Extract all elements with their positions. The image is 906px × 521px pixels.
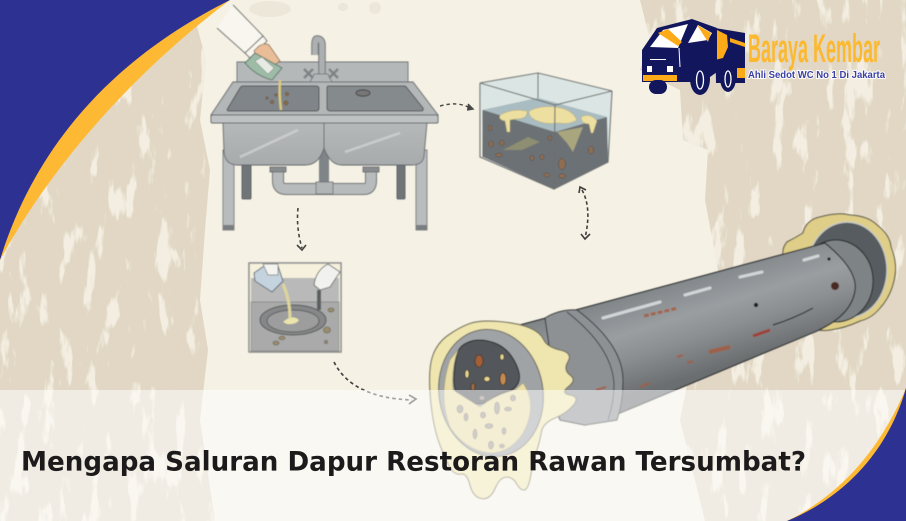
truck tank [715, 28, 745, 83]
arrow: sink to grease trap [440, 104, 473, 110]
tank contents [483, 98, 608, 189]
illustration: floor drain panel [249, 263, 341, 352]
tank glass edges [480, 73, 612, 189]
corner: top-left gold swoosh [0, 0, 230, 260]
sink basins body [223, 122, 427, 165]
truck door line [679, 48, 680, 67]
arrow: floor drain to pipe [334, 362, 416, 404]
sink backsplash [237, 62, 408, 86]
truck side window [688, 25, 712, 43]
title: Mengapa Saluran Dapur Restoran Rawan Tersumbat? [21, 446, 806, 478]
pipe rust holes [754, 257, 839, 307]
drain opening [260, 305, 326, 335]
truck bumper [643, 75, 677, 81]
tank glass back [480, 73, 612, 189]
sink countertop [211, 82, 438, 122]
food scraps [266, 92, 289, 105]
hand pouring bottle [217, 5, 282, 110]
arrow: sink to floor drain [297, 208, 306, 250]
corner: top-left blue shape [0, 0, 230, 260]
illustration: grease trap tank [480, 73, 612, 189]
illustration: double kitchen sink [211, 5, 438, 230]
left basin [227, 86, 319, 111]
floor scraps [273, 308, 334, 345]
illustration: clogged grease pipe [429, 214, 896, 499]
drain pipes [270, 150, 379, 194]
faucet [304, 39, 338, 82]
grease poured in drain [283, 317, 299, 324]
pipe body [520, 243, 855, 425]
pipe highlights [553, 256, 818, 330]
sink front legs [223, 150, 427, 230]
tank debris [488, 125, 594, 178]
right hand [314, 264, 340, 290]
floating grease [500, 106, 597, 152]
grease mass inside pipe [444, 350, 530, 453]
right basin [327, 86, 423, 111]
blockage debris [457, 354, 516, 449]
corner: bottom-right gold swoosh [787, 388, 906, 521]
drain strainer [356, 90, 370, 96]
arrow: tank to pipe, double headed [579, 187, 590, 239]
truck cab [642, 19, 717, 82]
sink rim [211, 115, 438, 123]
far pipe end grease flange [783, 214, 896, 330]
logo: tagline: Ahli Sedot WC No 1 Di Jakarta [748, 69, 885, 81]
truck windshield [650, 24, 688, 48]
bottom translucent band [0, 390, 906, 521]
truck headlights [647, 59, 673, 72]
pipe crack [773, 308, 813, 325]
logo: tanker truck [642, 19, 745, 95]
pipe coupling [545, 310, 623, 425]
pipe mouth grease [430, 321, 576, 499]
sink back legs [242, 163, 405, 199]
corner: bottom-right blue shape [787, 388, 906, 521]
rust marks [596, 308, 770, 390]
left hand and jug [254, 266, 283, 292]
truck wheels [649, 63, 736, 95]
pipe mouth dark interior [454, 340, 520, 404]
pipe mouth rim [429, 321, 553, 465]
